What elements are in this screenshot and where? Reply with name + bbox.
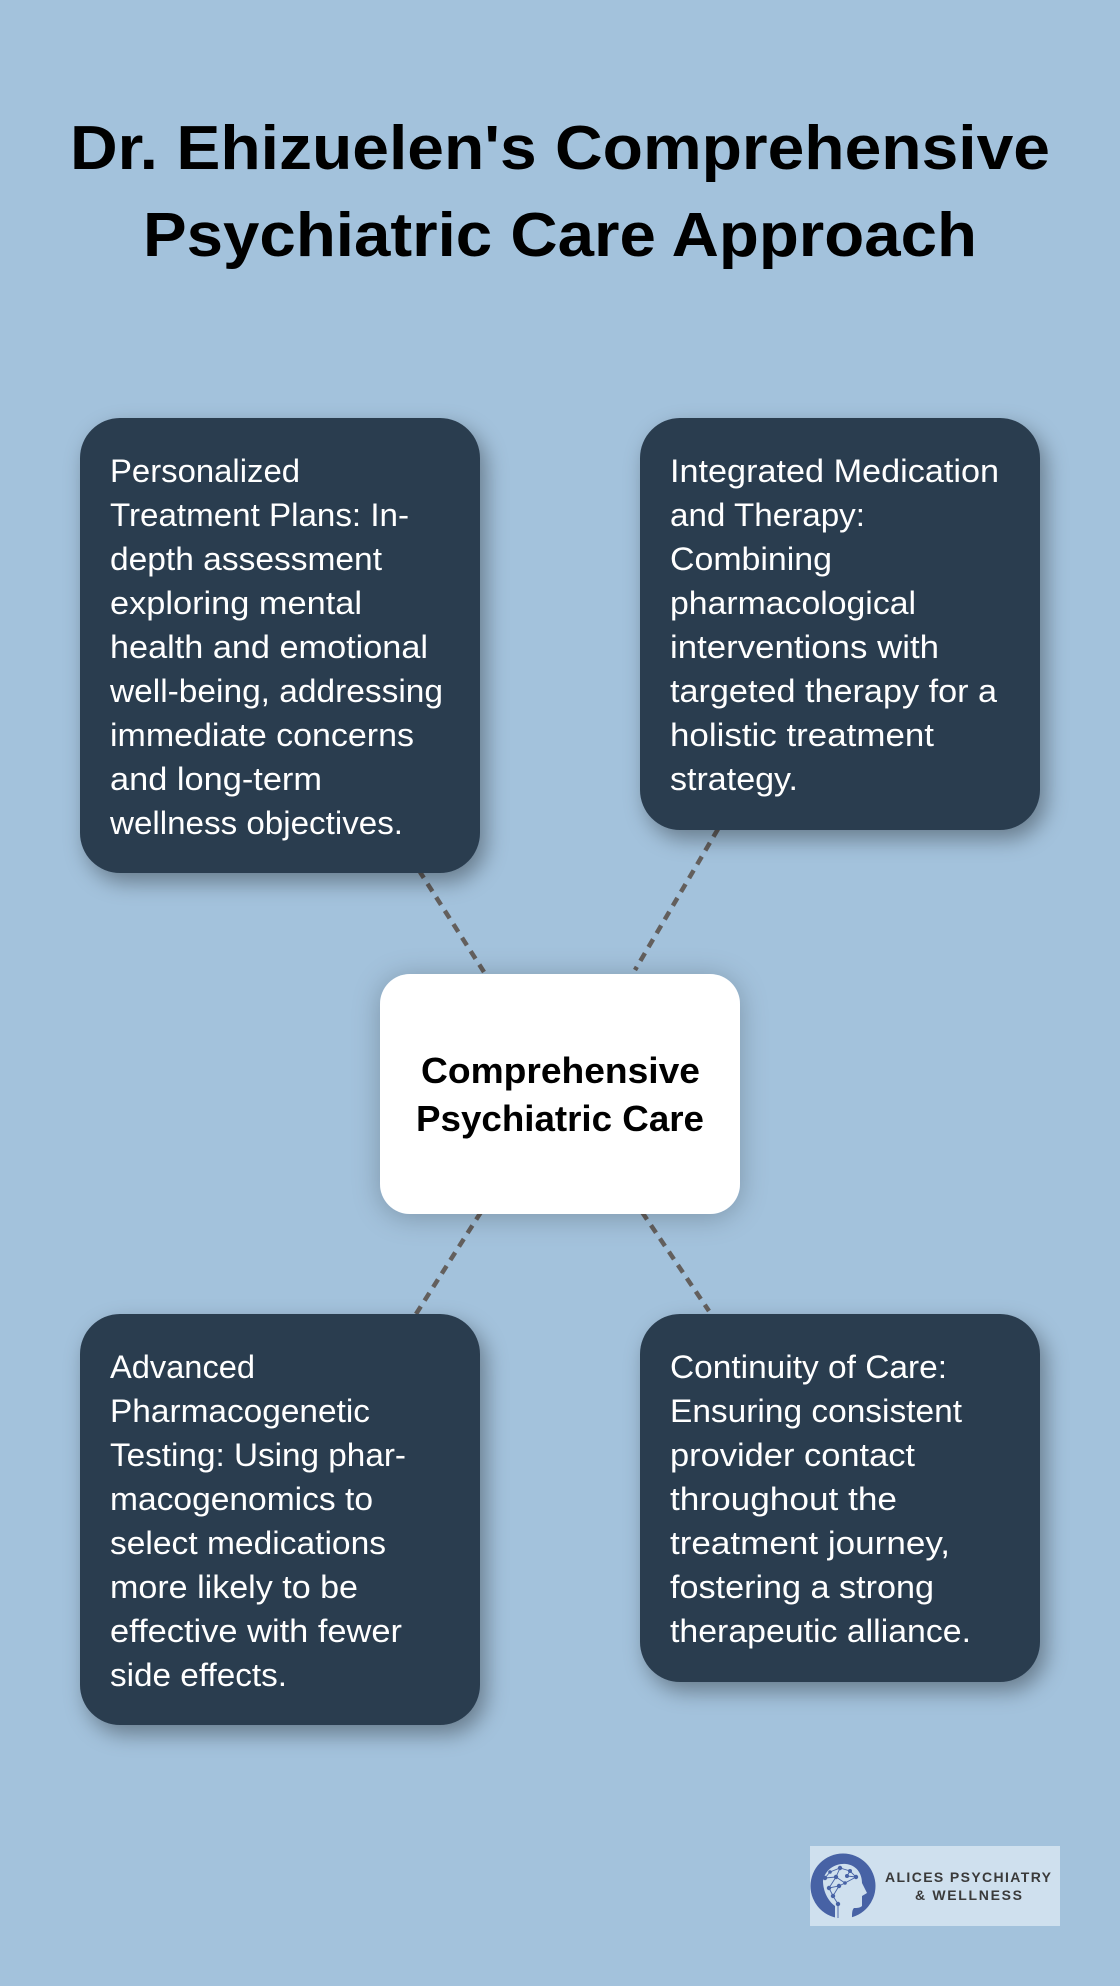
panel: personalized treatment plans: wellness objectives. (109, 805, 403, 841)
panel: advanced pharmacogenetic testing: Pharmacogenetic (110, 1393, 370, 1429)
panel: personalized treatment plans: well-being, addressing (109, 673, 443, 709)
title (70, 114, 1050, 270)
panel: continuity of care: fostering a strong (670, 1569, 934, 1605)
panel: continuity of care: therapeutic alliance. (670, 1613, 971, 1649)
panel: integrated medication and therapy: Integrated Medication (670, 453, 999, 489)
panel: personalized treatment plans: immediate concerns (110, 717, 414, 753)
logo wordmark: & WELLNESS (915, 1887, 1022, 1903)
panel: advanced pharmacogenetic testing: select medications (110, 1525, 386, 1561)
icon: head with neural network (810, 1854, 876, 1919)
panel: advanced pharmacogenetic testing: more likely to be (110, 1569, 358, 1605)
connector: medication and therapy to centre (635, 829, 718, 970)
panel: advanced pharmacogenetic testing (80, 1314, 480, 1725)
panel: integrated medication and therapy: Combining (670, 541, 832, 577)
panel: centre node (380, 974, 740, 1214)
panel: integrated medication and therapy: and Therapy: (670, 497, 865, 533)
dashed connectors (416, 829, 718, 1314)
panel: advanced pharmacogenetic testing: macogenomics to (110, 1481, 373, 1517)
panel: advanced pharmacogenetic testing: Advanced (110, 1349, 255, 1385)
panel: continuity of care: treatment journey, (670, 1525, 950, 1561)
panel: advanced pharmacogenetic testing: Testing: Using phar- (110, 1437, 406, 1473)
panel: personalized treatment plans: Treatment Plans: In- (110, 497, 409, 533)
panel: personalized treatment plans: Personalized (110, 453, 300, 489)
panel: integrated medication and therapy: targeted therapy for a (670, 673, 997, 709)
panel: personalized treatment plans: depth assessment (110, 541, 382, 577)
panel: continuity of care (640, 1314, 1040, 1682)
title: Dr. Ehizuelen's Comprehensive (70, 114, 1050, 183)
panel: centre node: Psychiatric Care (416, 1098, 704, 1139)
panel: integrated medication and therapy (640, 418, 1040, 830)
connector: pharmacogenetic testing to centre (416, 1212, 481, 1314)
panel: integrated medication and therapy: holistic treatment (670, 717, 934, 753)
connector: personalized plans to centre (420, 872, 484, 972)
panel: continuity of care: provider contact (670, 1437, 915, 1473)
panel: continuity of care: throughout the (670, 1481, 897, 1517)
logo: alices psychiatry and wellness (810, 1846, 1060, 1926)
panel: integrated medication and therapy: strategy. (670, 761, 798, 797)
panel: continuity of care: Ensuring consistent (670, 1393, 962, 1429)
panel: personalized treatment plans (80, 418, 480, 873)
title: Psychiatric Care Approach (143, 201, 977, 270)
panel: integrated medication and therapy: interventions with (670, 629, 939, 665)
panel: advanced pharmacogenetic testing: effective with fewer (110, 1613, 402, 1649)
panel: personalized treatment plans: and long-term (110, 761, 322, 797)
panel: continuity of care: Continuity of Care: (670, 1349, 947, 1385)
logo wordmark: ALICES PSYCHIATRY (885, 1869, 1052, 1885)
panel: advanced pharmacogenetic testing: side effects. (110, 1657, 287, 1693)
panel: centre node: Comprehensive (421, 1050, 700, 1091)
logo wordmark (885, 1869, 1052, 1903)
panel: integrated medication and therapy: pharmacological (670, 585, 916, 621)
connector: continuity of care to centre (642, 1212, 709, 1311)
panel: personalized treatment plans: health and emotional (110, 629, 428, 665)
panel: personalized treatment plans: exploring mental (110, 585, 362, 621)
